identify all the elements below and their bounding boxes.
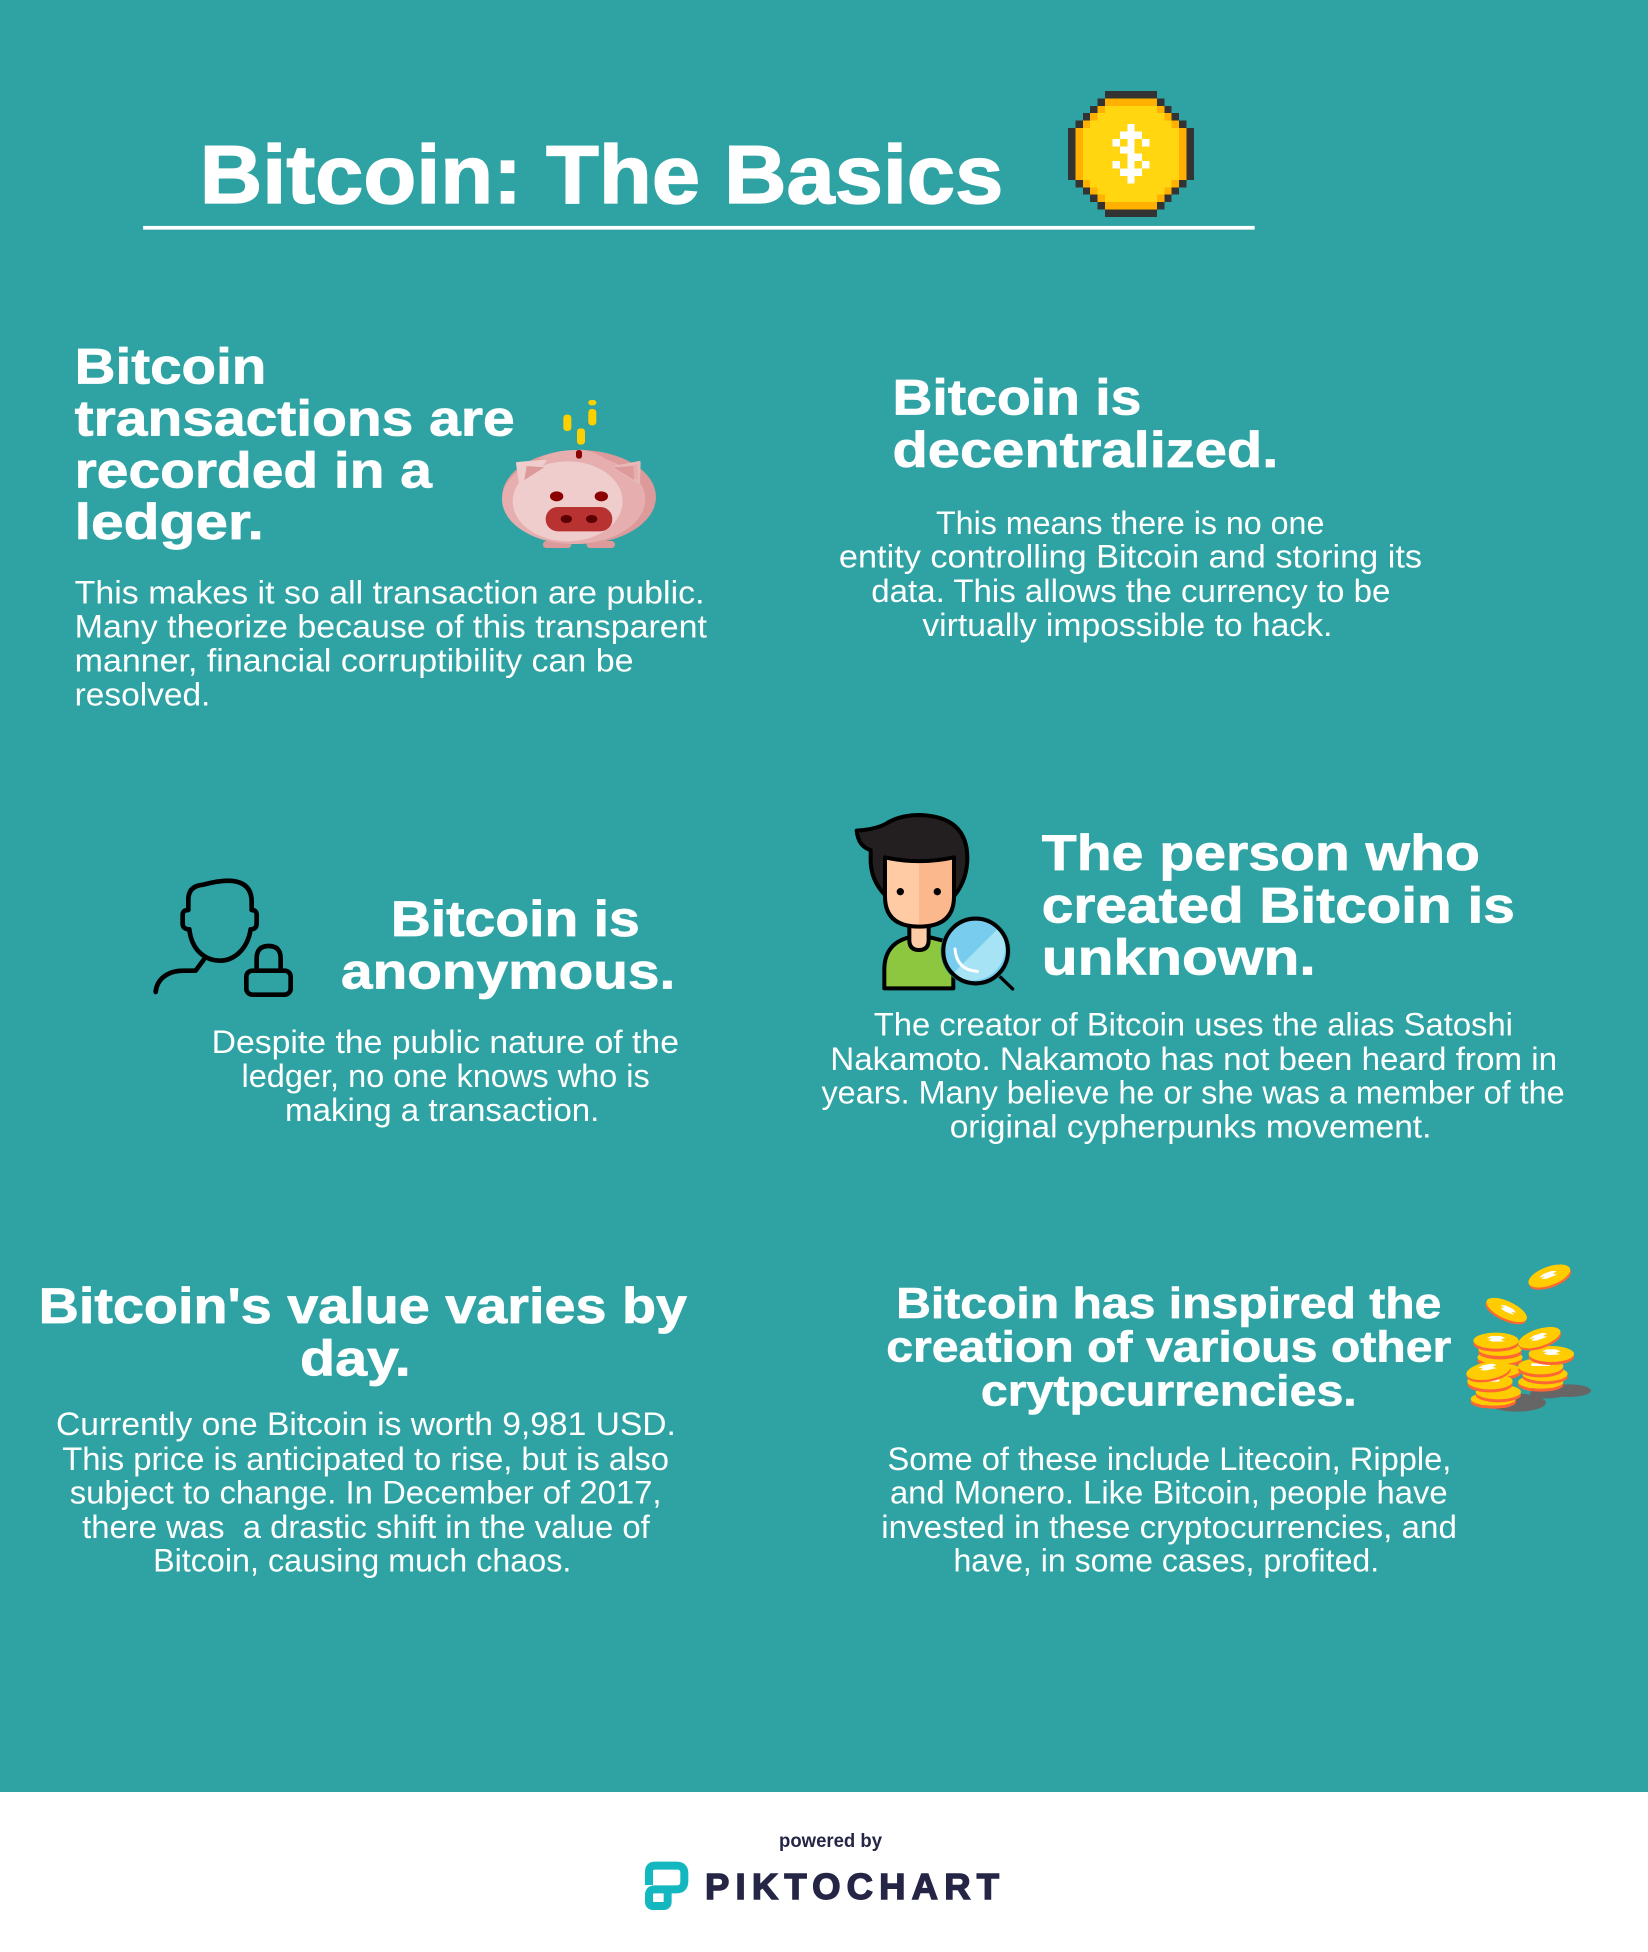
body: anonymous: making a transaction. bbox=[285, 1092, 599, 1128]
icon: person with magnifier bbox=[857, 815, 1013, 989]
powered by text: powered by bbox=[779, 1831, 882, 1852]
heading: unknown creator: unknown. bbox=[1042, 929, 1316, 986]
body: other cryptocurrencies: Some of these include Litecoin, Ripple, bbox=[887, 1441, 1451, 1477]
body: value: there was a drastic shift in the value of bbox=[82, 1509, 651, 1545]
heading: ledger: Bitcoin bbox=[75, 337, 266, 394]
footer: powered by Piktochart bbox=[649, 1831, 1003, 1907]
body: decentralized: data. This allows the currency to be bbox=[871, 573, 1390, 609]
panel: unknown creator bbox=[822, 815, 1565, 1145]
body: value: Bitcoin, causing much chaos. bbox=[153, 1542, 571, 1578]
heading: ledger: recorded in a bbox=[75, 441, 433, 498]
body: decentralized: virtually impossible to hack. bbox=[922, 607, 1332, 643]
heading: value: Bitcoin's value varies by bbox=[39, 1277, 687, 1334]
body: value: subject to change. In December of 2017, bbox=[70, 1475, 662, 1511]
heading: decentralized: Bitcoin is bbox=[892, 368, 1141, 425]
body: value: This price is anticipated to rise, but is also bbox=[62, 1441, 669, 1477]
heading: unknown creator: created Bitcoin is bbox=[1042, 876, 1515, 933]
body: decentralized: entity controlling Bitcoin and storing its bbox=[839, 539, 1422, 575]
body: anonymous: ledger, no one knows who is bbox=[241, 1058, 650, 1094]
heading: ledger: ledger. bbox=[75, 493, 264, 550]
icon: person with lock bbox=[156, 881, 291, 995]
panel: anonymous bbox=[156, 881, 679, 1128]
heading: ledger: transactions are bbox=[75, 390, 515, 447]
body: unknown creator bbox=[822, 1007, 1565, 1145]
panel: value bbox=[39, 1277, 687, 1578]
body: unknown creator: The creator of Bitcoin uses the alias Satoshi bbox=[874, 1007, 1513, 1043]
heading: ledger bbox=[75, 337, 515, 550]
panel: ledger bbox=[75, 337, 707, 713]
panel: decentralized bbox=[839, 368, 1422, 643]
icon: pixel coin bbox=[1068, 91, 1194, 217]
heading: decentralized bbox=[892, 368, 1278, 478]
heading: anonymous bbox=[341, 890, 675, 999]
body: other cryptocurrencies: invested in these cryptocurrencies, and bbox=[881, 1509, 1457, 1545]
heading: decentralized: decentralized. bbox=[892, 421, 1278, 478]
body: ledger: resolved. bbox=[75, 677, 210, 713]
body: decentralized bbox=[839, 505, 1422, 643]
body: unknown creator: original cypherpunks movement. bbox=[950, 1109, 1431, 1145]
body: other cryptocurrencies: have, in some cases, profited. bbox=[953, 1542, 1379, 1578]
heading: value bbox=[39, 1277, 687, 1386]
body: other cryptocurrencies: and Monero. Like Bitcoin, people have bbox=[890, 1475, 1448, 1511]
heading: anonymous: anonymous. bbox=[341, 942, 675, 999]
panel: other cryptocurrencies bbox=[881, 1260, 1591, 1578]
heading: unknown creator bbox=[1042, 824, 1515, 986]
body: decentralized: This means there is no one bbox=[936, 505, 1324, 541]
Piktochart wordmark: PIKTOCHART bbox=[705, 1866, 1003, 1907]
heading: other cryptocurrencies: creation of various other bbox=[886, 1324, 1451, 1372]
body: anonymous bbox=[212, 1024, 679, 1128]
heading: unknown creator: The person who bbox=[1042, 824, 1480, 881]
icon: Piktochart logo bbox=[649, 1866, 684, 1906]
heading: other cryptocurrencies: Bitcoin has inspired the bbox=[896, 1280, 1441, 1328]
icon: piggy bank bbox=[502, 400, 656, 548]
heading: other cryptocurrencies: crytpcurrencies. bbox=[981, 1367, 1357, 1415]
title: Bitcoin: The Basics bbox=[200, 130, 1003, 221]
icon: coin stacks bbox=[1465, 1260, 1591, 1412]
heading: value: day. bbox=[300, 1329, 411, 1386]
body: other cryptocurrencies bbox=[881, 1441, 1457, 1578]
body: value bbox=[56, 1406, 676, 1578]
heading: other cryptocurrencies bbox=[886, 1280, 1451, 1415]
body: value: Currently one Bitcoin is worth 9,981 USD. bbox=[56, 1406, 676, 1442]
body: unknown creator: years. Many believe he or she was a member of the bbox=[822, 1074, 1565, 1110]
body: anonymous: Despite the public nature of the bbox=[212, 1024, 679, 1060]
body: ledger: Many theorize because of this transparent bbox=[75, 608, 707, 644]
title bbox=[143, 130, 1255, 230]
heading: anonymous: Bitcoin is bbox=[391, 890, 640, 947]
body: ledger: manner, financial corruptibility can be bbox=[75, 643, 634, 679]
body: unknown creator: Nakamoto. Nakamoto has not been heard from in bbox=[830, 1041, 1557, 1077]
body: ledger bbox=[75, 575, 707, 713]
body: ledger: This makes it so all transaction are public. bbox=[75, 575, 705, 611]
